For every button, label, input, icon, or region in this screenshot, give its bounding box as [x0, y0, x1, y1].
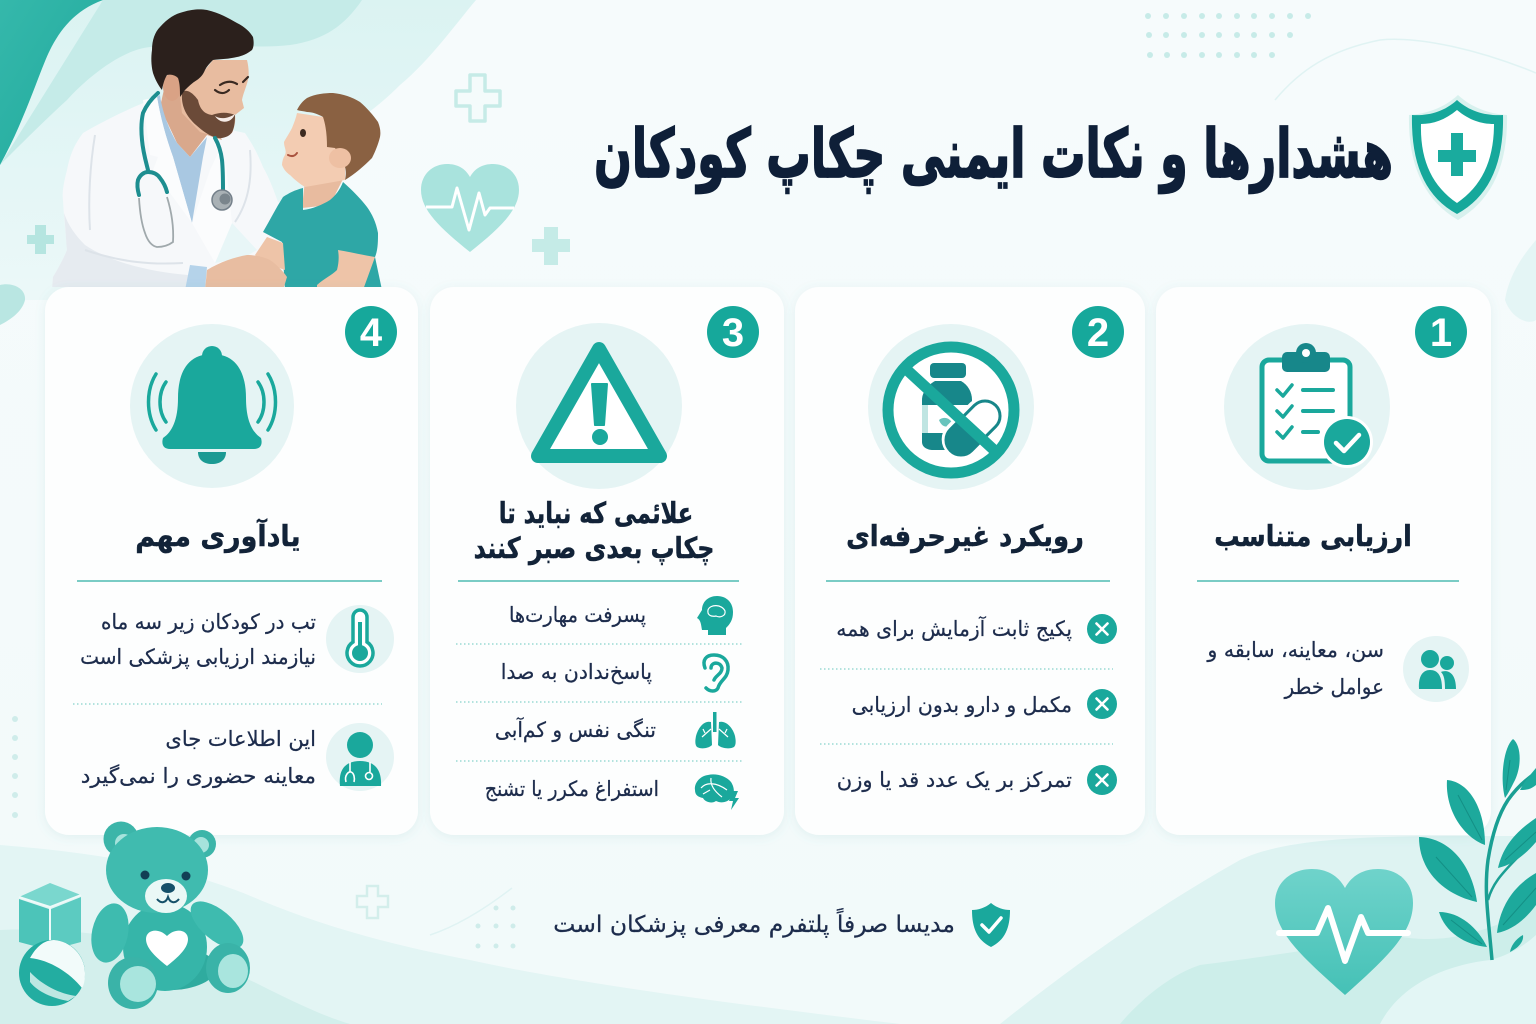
text: focus on a number: تمرکز بر یک عدد قد یا وزن [837, 768, 1072, 792]
decorative dot grid top right [1145, 13, 1311, 58]
neck [161, 92, 222, 157]
illustration: plant [1419, 739, 1536, 960]
heading [474, 497, 714, 566]
icon: x 3 [1087, 765, 1117, 795]
icon: footer shield [972, 903, 1010, 947]
beard [182, 91, 235, 138]
mouth [215, 114, 235, 122]
stethoscope [137, 93, 223, 195]
heading: علائمی که نباید تا [499, 497, 693, 531]
decorative footer dots [476, 906, 516, 948]
text: not a substitute [81, 727, 316, 789]
icon: warning triangle [516, 323, 682, 489]
illustration: toy block [19, 883, 81, 950]
text: vomiting or seizure: استفراغ مکرر یا تشنج [485, 776, 659, 801]
eye and brow [215, 77, 248, 93]
illustration: teddy bear [86, 822, 251, 1009]
heart with pulse, upper [421, 164, 519, 252]
text: not a substitute: معاینه حضوری را نمی‌گیرد [81, 763, 316, 789]
icon: no medication [868, 324, 1034, 490]
icon: doctor [326, 723, 394, 791]
icon: people [1403, 636, 1469, 702]
text: age, exam, history [1206, 638, 1384, 699]
chest piece [212, 190, 232, 210]
boy right arm [317, 250, 375, 290]
decorative plus outline [456, 75, 500, 121]
doctor coat [52, 97, 290, 290]
panel: card 2 non-professional approach [795, 287, 1145, 835]
boy eye and smile [288, 153, 297, 156]
badge 2 [1072, 306, 1124, 358]
text: fever [80, 610, 316, 669]
boy shirt [263, 182, 382, 290]
icon: head [697, 596, 733, 635]
icon: lungs [695, 712, 736, 748]
heading: یادآوری مهم [135, 518, 301, 553]
illustration: big heart with pulse [1275, 869, 1413, 995]
doctor hand [205, 255, 287, 290]
badge 3 [707, 306, 759, 358]
badge 1 [1415, 306, 1467, 358]
decorative footer plus [357, 886, 388, 918]
shirt [157, 95, 207, 223]
background gap between coat and boy [215, 223, 257, 263]
text: no response to sound: پاسخ‌ندادن به صدا [501, 660, 652, 684]
text: supplements: مکمل و دارو بدون ارزیابی [852, 693, 1072, 717]
text: fever: نیازمند ارزیابی پزشکی است [80, 645, 316, 669]
text: age, exam, history: سن، معاینه، سابقه و [1206, 638, 1384, 662]
footer note [553, 903, 1010, 947]
decorative plus centre [532, 227, 570, 265]
heading: ارزیابی متناسب [1214, 520, 1412, 553]
icon: thermometer [326, 605, 394, 673]
illustration: ball [19, 940, 85, 1006]
text: breathing: تنگی نفس و کم‌آبی [495, 717, 656, 742]
face [178, 60, 249, 138]
decorative plus left [27, 225, 54, 254]
icon: x 2 [1087, 689, 1117, 719]
heading: رویکرد غیرحرفه‌ای [846, 521, 1084, 553]
text: fever: تب در کودکان زیر سه ماه [101, 610, 316, 634]
text: skills: پسرفت مهارت‌ها [509, 602, 646, 628]
boy hair [297, 93, 380, 180]
panel: card 4 reminder [45, 287, 418, 835]
badge 2: 2 [1087, 311, 1109, 355]
coat creases [85, 135, 251, 264]
icon: x 1 [1087, 614, 1117, 644]
panel: card 3 warning signs [430, 287, 784, 835]
ear [163, 74, 180, 94]
heading: چکاپ بعدی صبر کنند [474, 532, 714, 566]
right lapel [192, 222, 193, 223]
left lapel [143, 97, 192, 223]
text: not a substitute: این اطلاعات جای [165, 727, 316, 751]
footer note: مدیسا صرفاً پلتفرم معرفی پزشکان است [553, 907, 955, 938]
hair [151, 9, 254, 97]
panel: card 1 proper assessment [1156, 287, 1491, 835]
text: fixed test package: پکیج ثابت آزمایش برای همه [836, 616, 1072, 641]
icon: bell [130, 324, 294, 488]
badge 4: 4 [360, 311, 383, 355]
title: هشدارها و نکات ایمنی چکاپ کودکان [594, 116, 1393, 194]
boy face [282, 113, 345, 187]
icon: ear [704, 655, 728, 691]
badge 4 [345, 306, 397, 358]
icon: clipboard [1224, 324, 1390, 490]
icon: brain with bolt [695, 774, 739, 810]
stethoscope thin tube [139, 197, 173, 247]
badge 1: 1 [1430, 311, 1452, 355]
coat shadow [52, 213, 188, 290]
boy left arm [255, 237, 285, 270]
boy ear [329, 148, 351, 168]
doctor cuff [186, 265, 207, 287]
text: age, exam, history: عوامل خطر [1283, 675, 1384, 699]
icon: title shield [1409, 95, 1507, 220]
illustration: doctor and child [52, 9, 382, 290]
decorative dots left [12, 716, 18, 818]
boy neck [303, 180, 342, 208]
badge 3: 3 [722, 311, 744, 355]
